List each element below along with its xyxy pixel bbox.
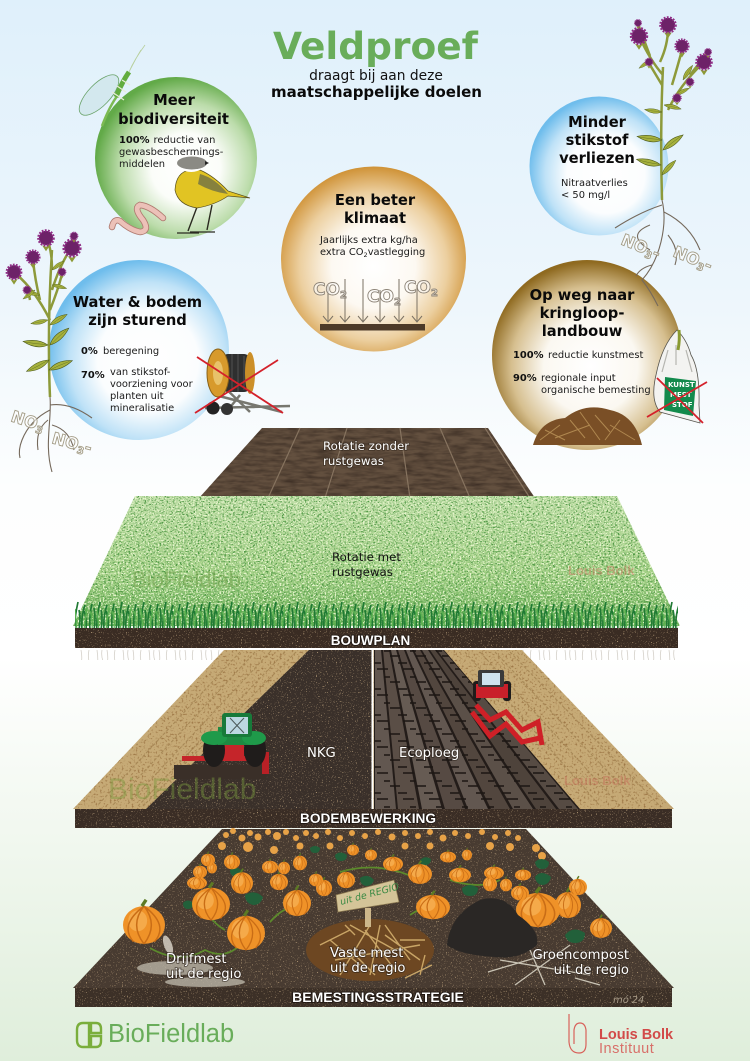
logo: Louis Bolk Instituut: Louis Bolk bbox=[599, 1027, 674, 1043]
icon: lacewing bbox=[73, 45, 145, 126]
white divider bbox=[372, 650, 374, 809]
title: Veldproef: Veldproef bbox=[273, 24, 479, 68]
subtitle: maatschappelijke doelen bbox=[271, 83, 482, 101]
text: beregening: 0% bbox=[81, 346, 98, 357]
label: NO3 left: NO bbox=[9, 407, 40, 433]
text: stikstofvoorziening: mineralisatie bbox=[110, 403, 174, 414]
text: reductie kunstmest: 100% bbox=[513, 350, 544, 361]
ecoploeg furrows bbox=[374, 650, 580, 809]
heading: water en bodem: Water & bodem bbox=[73, 294, 202, 311]
logo: Louis Bolk Instituut bbox=[569, 1014, 674, 1057]
icon: earthworm bbox=[112, 205, 163, 232]
band: bemesting bbox=[75, 988, 672, 1007]
label: rotatie met rustgewas: Rotatie met bbox=[332, 550, 401, 564]
text: jaarlijks: extra CO bbox=[320, 247, 364, 258]
heading: meer biodiversiteit: biodiversiteit bbox=[118, 111, 229, 128]
icon: fertiliser bag bbox=[647, 330, 707, 423]
icon: yellow wagtail bbox=[175, 156, 250, 233]
panel: minder stikstof circle bbox=[530, 96, 668, 236]
text: reductie kunstmest: reductie kunstmest bbox=[548, 350, 643, 361]
panel: bemestingsstrategie field bbox=[73, 828, 674, 1007]
icon: fertiliser bag: MEST bbox=[670, 391, 692, 399]
heading: minder stikstof verliezen: verliezen bbox=[559, 150, 635, 167]
grass blades front bbox=[75, 600, 678, 630]
icon: co2 arrows bbox=[323, 279, 422, 322]
label: NKG: NKG bbox=[307, 746, 336, 761]
pumpkins bbox=[123, 843, 612, 950]
panel: water en bodem circle bbox=[49, 260, 290, 440]
icon: fertiliser bag: KUNST bbox=[668, 381, 695, 389]
label: NO3 right: 3 bbox=[643, 249, 653, 262]
heading: een beter klimaat: klimaat bbox=[344, 210, 406, 227]
text: stikstofvoorziening: planten uit bbox=[110, 391, 164, 402]
roots bbox=[19, 397, 92, 472]
watermark: BioFieldlab: BioFieldlab bbox=[132, 567, 241, 592]
label: NO3 left lower: NO bbox=[50, 429, 81, 454]
text: reductie: reductie van bbox=[154, 135, 215, 146]
label: NO3 right: - bbox=[650, 243, 663, 263]
label: NO3 left: 3 bbox=[34, 425, 44, 437]
label: groencompost: Groencompost bbox=[532, 948, 629, 963]
label: drijfmest: uit de regio bbox=[166, 967, 241, 982]
text: jaarlijks: Jaarlijks extra kg/ha bbox=[319, 235, 418, 246]
text: beregening: beregening bbox=[103, 346, 159, 357]
panel: klimaat circle bbox=[281, 166, 466, 352]
panel: bodembewerking field bbox=[73, 650, 674, 828]
heading: minder stikstof verliezen: stikstof bbox=[566, 132, 629, 149]
panel: bouwplan green field bbox=[73, 496, 680, 660]
label: vaste mest: uit de regio bbox=[330, 961, 405, 976]
label: NO3 left lower: 3 bbox=[76, 445, 85, 458]
far pumpkins row bbox=[218, 828, 546, 860]
label: Ecoploeg: Ecoploeg bbox=[399, 746, 459, 761]
watermark: Louis Bolk: Louis Bolk bbox=[564, 773, 631, 788]
label: co2 right: 2 bbox=[431, 288, 438, 299]
text: stikstofvoorziening: 70% bbox=[81, 370, 105, 381]
label: co2 left: CO bbox=[313, 280, 340, 300]
label: co2 mid: CO bbox=[367, 287, 394, 307]
groencompost pile bbox=[447, 898, 600, 985]
heading: minder stikstof verliezen: Minder bbox=[568, 114, 627, 131]
logo: Louis Bolk Instituut: Instituut bbox=[599, 1041, 654, 1057]
text: regionale input: 90% bbox=[513, 373, 537, 384]
icon: alfalfa plant left bbox=[7, 231, 92, 472]
label: co2 right: CO bbox=[404, 278, 431, 298]
signature: mó'24 bbox=[613, 994, 644, 1006]
watermark: Louis Bolk: Louis Bolk bbox=[568, 563, 635, 578]
label: rotatie met rustgewas: rustgewas bbox=[332, 565, 393, 579]
panel: biodiversiteit circle bbox=[73, 45, 257, 239]
text: stikstofvoorziening: voorziening voor bbox=[110, 379, 194, 390]
roots bbox=[615, 200, 700, 306]
vaste mest heap bbox=[306, 919, 434, 981]
label: NO3 right: NO bbox=[619, 230, 651, 258]
text: nitraatverlies: Nitraatverlies bbox=[561, 178, 628, 189]
slurry puddles bbox=[137, 934, 245, 987]
soil bar bbox=[320, 324, 425, 330]
band: bodembewerking bbox=[75, 809, 672, 828]
vines and leaves bbox=[150, 846, 585, 957]
heading: op weg naar kringlooplandbouw: kringloop- bbox=[540, 305, 624, 322]
heading: meer biodiversiteit: Meer bbox=[153, 92, 196, 109]
heading: water en bodem: zijn sturend bbox=[88, 312, 187, 329]
sign: uit de regio: uit de REGIO bbox=[339, 881, 401, 908]
tractor: green with cultivator bbox=[174, 713, 269, 779]
text: reductie: middelen bbox=[119, 159, 165, 170]
label: NO3 right lower: NO bbox=[671, 242, 703, 270]
label: vaste mest: Vaste mest bbox=[330, 946, 403, 961]
logo: BioFieldlab: BioFieldlab bbox=[108, 1020, 234, 1048]
icon: irrigation reel crossed out bbox=[195, 349, 290, 415]
tractor: red with plough bbox=[472, 670, 542, 745]
icon: alfalfa plant right bbox=[615, 18, 711, 306]
label: groencompost: uit de regio bbox=[554, 963, 629, 978]
text: nitraatverlies: < 50 mg/l bbox=[561, 190, 610, 201]
text: regionale input: organische bemesting bbox=[541, 385, 651, 396]
icon: fertiliser bag: STOF bbox=[672, 401, 693, 409]
band label: BODEMBEWERKING: BODEMBEWERKING bbox=[300, 811, 436, 826]
label: co2 left: 2 bbox=[340, 290, 347, 301]
band: bouwplan bbox=[75, 628, 678, 648]
text: stikstofvoorziening: van stikstof- bbox=[110, 367, 171, 378]
subtitle: draagt bij aan deze bbox=[309, 68, 443, 84]
panel: top field rotatie zonder rustgewas bbox=[199, 428, 535, 498]
text: regionale input: regionale input bbox=[541, 373, 616, 384]
label: rotatie zonder rustgewas: rustgewas bbox=[323, 454, 384, 468]
label: drijfmest: Drijfmest bbox=[166, 952, 227, 967]
text: reductie: gewasbeschermings- bbox=[119, 147, 224, 158]
roots under band bbox=[80, 646, 675, 660]
panel: kringlooplandbouw circle bbox=[492, 260, 707, 450]
label: co2 mid: 2 bbox=[394, 297, 401, 308]
text: jaarlijks: 2 bbox=[364, 251, 368, 259]
heading: een beter klimaat: Een beter bbox=[335, 192, 416, 209]
sign: uit de regio bbox=[336, 880, 401, 927]
label: NO3 left lower: - bbox=[83, 437, 94, 457]
text: reductie: 100% bbox=[119, 135, 150, 146]
heading: op weg naar kringlooplandbouw: landbouw bbox=[542, 323, 623, 340]
label: NO3 right lower: 3 bbox=[695, 261, 705, 274]
subtitle bbox=[271, 68, 482, 101]
NKG dark strip bbox=[146, 650, 372, 809]
label: NO3 right lower: - bbox=[702, 255, 715, 275]
band label: BEMESTINGSSTRATEGIE: BEMESTINGSSTRATEGIE bbox=[292, 989, 464, 1005]
text: jaarlijks: vastlegging bbox=[368, 247, 425, 258]
icon: organic heap bbox=[533, 407, 642, 445]
band label: BOUWPLAN: BOUWPLAN bbox=[331, 633, 410, 648]
watermark: BioFieldlab: BioFieldlab bbox=[108, 773, 256, 806]
heading: op weg naar kringlooplandbouw: Op weg naar bbox=[530, 287, 635, 304]
label: rotatie zonder rustgewas: Rotatie zonder bbox=[323, 439, 409, 453]
